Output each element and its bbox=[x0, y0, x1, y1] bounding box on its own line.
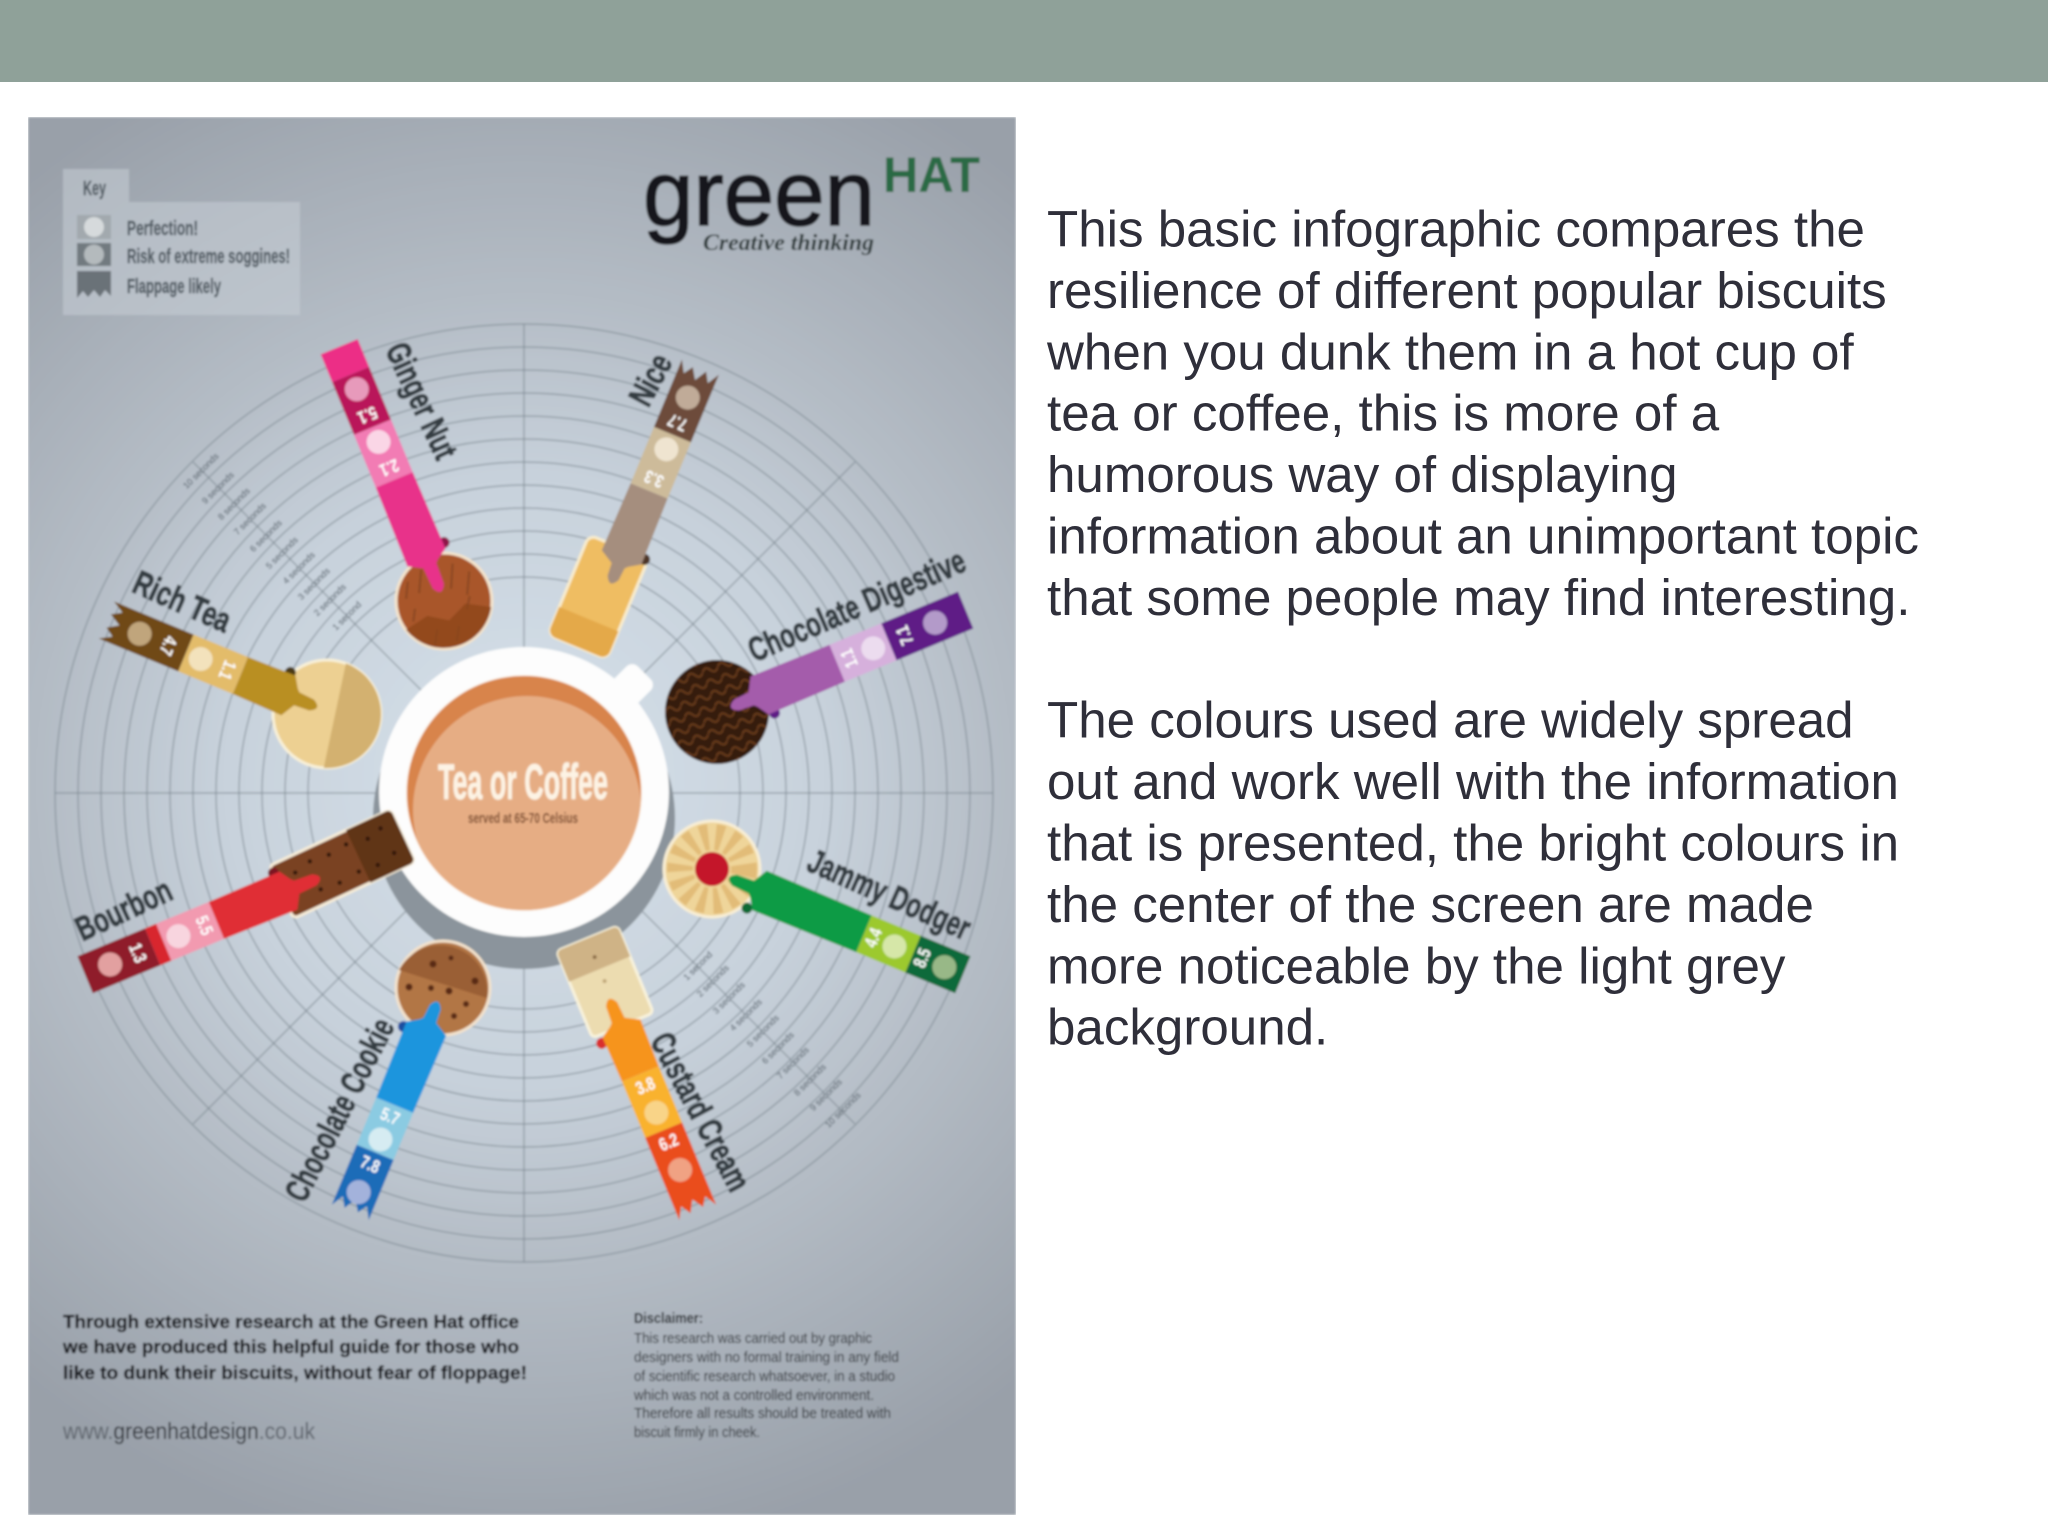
research statement: we have produced this helpful guide for those who bbox=[62, 1336, 519, 1357]
spoke time labels: upper left: 2 seconds bbox=[312, 581, 348, 618]
band: Chocolate Digestive bbox=[723, 591, 976, 733]
commentary paragraph 1 bbox=[1046, 200, 1919, 626]
key: Key bbox=[83, 178, 107, 200]
spoke time labels: upper left: 3 seconds bbox=[296, 565, 332, 602]
band: Nice: 7.7 bbox=[665, 410, 690, 435]
cup: served at 65-70 Celsius bbox=[468, 810, 578, 827]
band: Nice bbox=[591, 359, 726, 594]
key bbox=[63, 169, 300, 315]
spoke time labels: lower right: 7 seconds bbox=[775, 1044, 811, 1081]
disclaimer: biscuit firmly in cheek. bbox=[634, 1425, 760, 1441]
spoke time labels: upper left bbox=[181, 451, 363, 632]
commentary paragraph 2: more noticeable by the light grey bbox=[1047, 937, 1786, 994]
band: Chocolate Cookie bbox=[325, 991, 457, 1220]
research statement: Through extensive research at the Green Hat office bbox=[63, 1311, 519, 1332]
band: Custard Cream: 3.8 bbox=[633, 1073, 658, 1099]
band: Ginger Nut: 2.1 bbox=[377, 455, 402, 481]
commentary paragraph 1: that some people may find interesting. bbox=[1047, 569, 1910, 626]
commentary paragraph 2: background. bbox=[1047, 999, 1328, 1056]
commentary paragraph 1: information about an unimportant topic bbox=[1047, 508, 1919, 564]
biscuit: Jammy Dodger bbox=[664, 821, 760, 917]
key: Flappage likely bbox=[127, 276, 222, 298]
biscuit: Ginger Nut bbox=[385, 542, 503, 660]
disclaimer: This research was carried out by graphic bbox=[634, 1331, 872, 1347]
label: Ginger Nut: Ginger Nut bbox=[378, 337, 464, 465]
label: Bourbon: Bourbon bbox=[70, 871, 178, 949]
disclaimer: of scientific research whatsoever, in a studio bbox=[634, 1369, 895, 1385]
band: Jammy Dodger: 4.4 bbox=[860, 925, 886, 950]
spoke time labels: upper left: 7 seconds bbox=[232, 500, 268, 537]
logo: green HAT: green bbox=[643, 143, 875, 245]
biscuit: Custard Cream bbox=[557, 926, 653, 1038]
band: Rich Tea bbox=[98, 595, 328, 727]
cup: Tea or Coffee bbox=[438, 754, 608, 810]
key: Risk of extreme soggines! bbox=[127, 246, 290, 268]
spoke time labels: upper left: 6 seconds bbox=[248, 517, 284, 554]
band: Rich Tea: 1.1 bbox=[215, 658, 240, 683]
disclaimer: Disclaimer: bbox=[634, 1311, 703, 1327]
commentary paragraph 2: out and work well with the information bbox=[1047, 753, 1899, 810]
band: Bourbon bbox=[75, 852, 328, 994]
commentary paragraph 1: This basic infographic compares the bbox=[1047, 200, 1865, 258]
label: Rich Tea: Rich Tea bbox=[127, 564, 238, 641]
commentary paragraph 2: the center of the screen are made bbox=[1047, 876, 1814, 933]
band: Jammy Dodger: 8.5 bbox=[909, 945, 935, 971]
logo: green HAT: HAT bbox=[883, 147, 980, 203]
disclaimer bbox=[633, 1311, 899, 1441]
disclaimer: Therefore all results should be treated with bbox=[634, 1406, 891, 1422]
header bar bbox=[0, 0, 2048, 82]
spoke time labels: lower right: 8 seconds bbox=[792, 1061, 828, 1098]
spoke time labels: lower right: 1 second bbox=[681, 949, 714, 982]
band: Chocolate Cookie: 5.7 bbox=[377, 1103, 403, 1129]
label: Nice: Nice bbox=[622, 348, 680, 412]
spoke time labels: lower right: 2 seconds bbox=[695, 962, 731, 999]
research statement bbox=[62, 1311, 527, 1383]
research statement: like to dunk their biscuits, without fear of floppage! bbox=[63, 1362, 527, 1383]
label: Jammy Dodger: Jammy Dodger bbox=[802, 842, 976, 948]
spoke time labels: lower right: 3 seconds bbox=[711, 979, 747, 1016]
band: Bourbon: 1.3 bbox=[125, 940, 151, 966]
biscuit: Rich Tea bbox=[263, 650, 391, 778]
disclaimer: which was not a controlled environment. bbox=[633, 1388, 874, 1404]
band: Chocolate Digestive: 7.1 bbox=[892, 623, 918, 648]
spoke time labels: lower right: 10 seconds bbox=[823, 1090, 863, 1130]
band: Ginger Nut bbox=[320, 336, 466, 600]
spoke time labels: lower right: 5 seconds bbox=[745, 1012, 781, 1049]
commentary paragraph 1: resilience of different popular biscuits bbox=[1047, 262, 1887, 319]
spoke time labels: upper left: 8 seconds bbox=[216, 485, 252, 522]
spoke time labels: lower right bbox=[681, 949, 863, 1130]
band: Custard Cream: 6.2 bbox=[656, 1129, 681, 1155]
commentary paragraph 2: that is presented, the bright colours in bbox=[1047, 814, 1899, 872]
band: Bourbon: 5.5 bbox=[191, 913, 217, 938]
cup bbox=[379, 647, 669, 937]
key: Perfection! bbox=[127, 218, 198, 240]
spoke time labels: upper left: 9 seconds bbox=[200, 469, 236, 506]
spoke time labels: upper left: 10 seconds bbox=[181, 451, 221, 491]
label: Chocolate Cookie: Chocolate Cookie bbox=[278, 1012, 402, 1208]
biscuit: Chocolate Cookie bbox=[396, 941, 490, 1035]
spoke time labels: lower right: 6 seconds bbox=[760, 1029, 796, 1066]
spoke time labels: lower right: 4 seconds bbox=[728, 996, 764, 1033]
band: Chocolate Cookie: 7.8 bbox=[358, 1152, 383, 1177]
cup shadow bbox=[373, 667, 675, 969]
spoke time labels: upper left: 1 second bbox=[330, 599, 363, 632]
wheel: concentric time rings and spokes bbox=[55, 324, 993, 1262]
logo: green HAT bbox=[643, 143, 980, 255]
spoke time labels: upper left: 4 seconds bbox=[281, 549, 317, 586]
band: Nice: 3.3 bbox=[642, 466, 667, 492]
label: Chocolate Digestive: Chocolate Digestive bbox=[743, 542, 971, 670]
band: Ginger Nut: 5.1 bbox=[355, 402, 380, 428]
biscuit: Chocolate Digestive bbox=[665, 660, 769, 764]
commentary paragraph 1: when you dunk them in a hot cup of bbox=[1046, 323, 1854, 380]
commentary paragraph 2: The colours used are widely spread bbox=[1047, 692, 1854, 749]
biscuit: Nice bbox=[548, 535, 648, 659]
band: Rich Tea: 4.7 bbox=[155, 633, 181, 658]
poster: biscuit dunking infographic bbox=[28, 117, 1016, 1515]
disclaimer: designers with no formal training in any field bbox=[634, 1350, 899, 1366]
website: www.greenhatdesign.co.uk bbox=[62, 1418, 315, 1444]
commentary paragraph 1: tea or coffee, this is more of a bbox=[1047, 385, 1720, 442]
spoke time labels: upper left: 5 seconds bbox=[264, 534, 300, 571]
commentary paragraph 2 bbox=[1047, 692, 1899, 1056]
spoke time labels: lower right: 9 seconds bbox=[808, 1076, 844, 1113]
logo: green HAT: Creative thinking bbox=[703, 230, 874, 255]
band: Jammy Dodger bbox=[719, 859, 971, 999]
commentary paragraph 1: humorous way of displaying bbox=[1047, 446, 1678, 503]
band: Chocolate Digestive: 1.1 bbox=[836, 646, 862, 671]
biscuit: Bourbon bbox=[269, 809, 415, 919]
label: Custard Cream: Custard Cream bbox=[642, 1026, 758, 1198]
poster background bbox=[28, 117, 1016, 1515]
band: Custard Cream bbox=[582, 991, 717, 1224]
